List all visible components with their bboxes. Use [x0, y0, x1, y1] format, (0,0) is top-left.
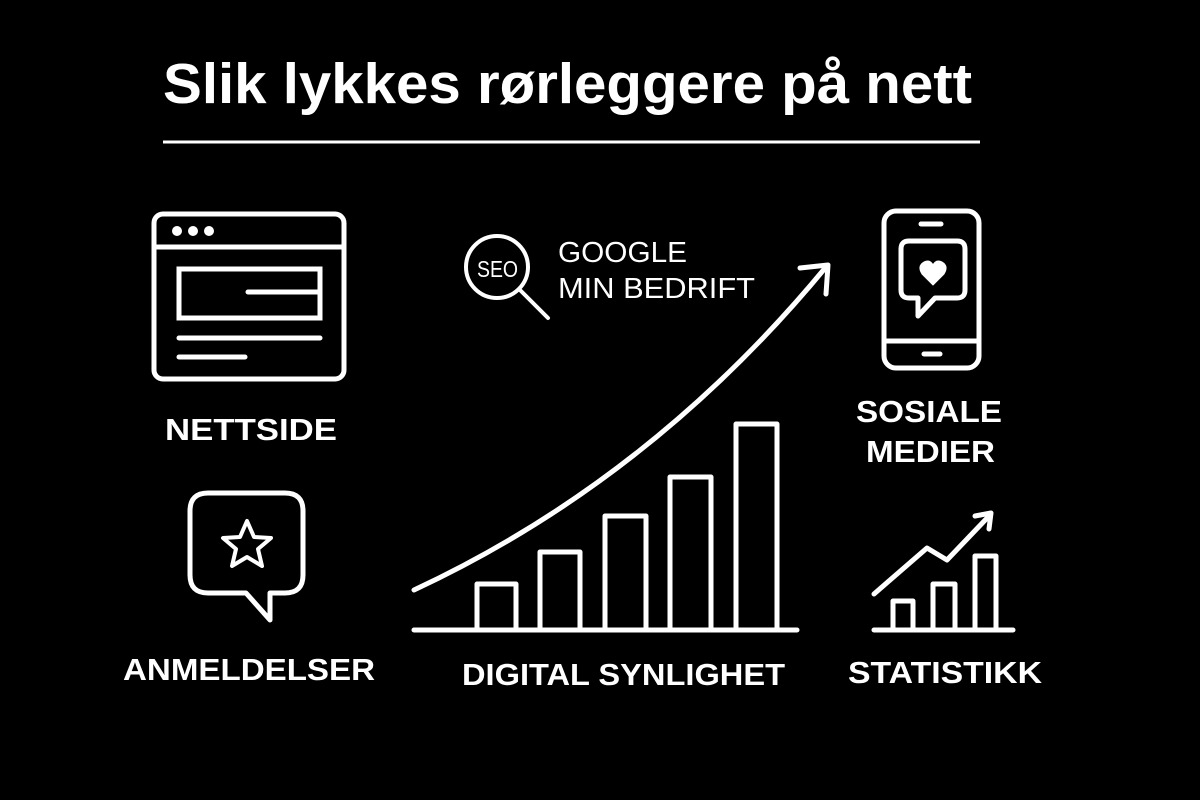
icon: SEO magnifier — [466, 236, 548, 318]
icon: phone with heart bubble — [884, 211, 979, 368]
label: anmeldelser: ANMELDELSER — [123, 652, 375, 687]
label: sosiale medier: SOSIALE — [856, 394, 1002, 429]
chart: digital synlighet bars and growth arrow — [414, 265, 828, 630]
label: sosiale medier — [856, 394, 1002, 469]
label: statistikk: STATISTIKK — [848, 655, 1043, 690]
icon: statistics — [874, 513, 1013, 630]
label: google min bedrift: GOOGLE — [558, 237, 687, 269]
label: digital synlighet: DIGITAL SYNLIGHET — [462, 657, 785, 692]
label: nettside: NETTSIDE — [165, 412, 337, 447]
label: google min bedrift: MIN BEDRIFT — [558, 273, 755, 305]
label: google min bedrift — [558, 237, 755, 305]
label: sosiale medier: MEDIER — [866, 434, 995, 469]
icon: review bubble with star — [190, 493, 303, 620]
icon: SEO magnifier: SEO — [477, 256, 518, 282]
title: Slik lykkes rørleggere på nett — [163, 52, 972, 116]
icon: browser (nettside) — [154, 214, 344, 379]
